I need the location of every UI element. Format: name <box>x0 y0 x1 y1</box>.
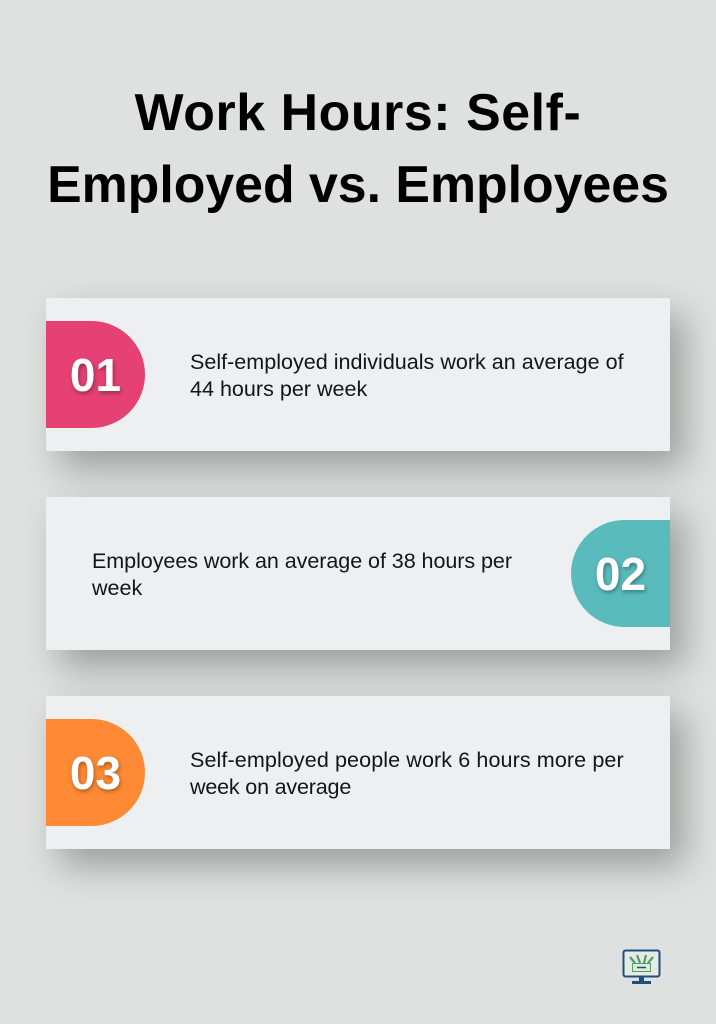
panel: card 03 <box>46 696 670 849</box>
badge 02 <box>571 520 670 627</box>
text: card 02: Employees work an average of 38 hours per <box>92 548 512 573</box>
panel: card 02 <box>46 497 670 650</box>
text: card 03 <box>190 747 624 799</box>
panel: card 01 <box>46 298 670 451</box>
text: card 02 <box>92 548 512 600</box>
badge 01: 01 <box>70 349 121 401</box>
text: card 03: week on average <box>190 774 351 799</box>
text: card 01 <box>190 349 624 401</box>
title: Work Hours: Self- <box>135 83 581 141</box>
text: card 03: Self-employed people work 6 hours more per <box>190 747 624 772</box>
title <box>47 83 669 213</box>
text: card 01: 44 hours per week <box>190 376 367 401</box>
badge 01 <box>46 321 145 428</box>
badge 02: 02 <box>595 548 646 600</box>
text: card 01: Self-employed individuals work an average of <box>190 349 624 374</box>
badge 03: 03 <box>70 747 121 799</box>
text: card 02: week <box>92 575 142 600</box>
icon: monitor logo <box>622 950 660 984</box>
badge 03 <box>46 719 145 826</box>
title: Employed vs. Employees <box>47 155 669 213</box>
